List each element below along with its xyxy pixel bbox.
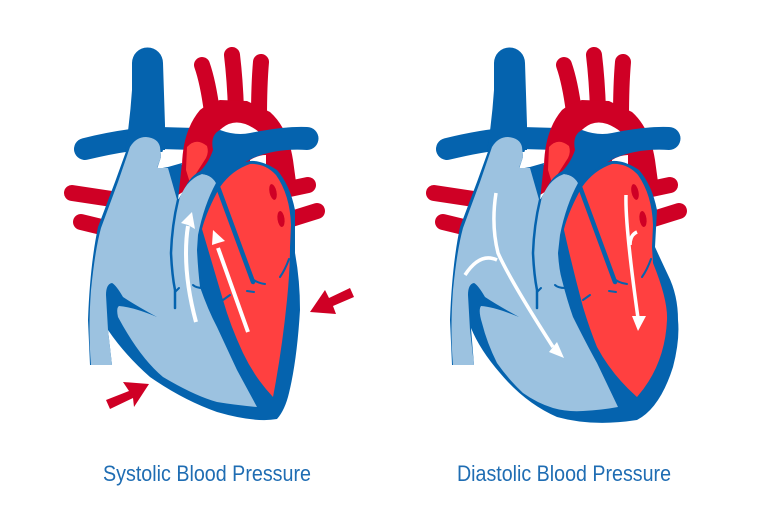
aorta inner bright section [548,142,570,183]
white flow arrows [186,226,248,332]
aorta inner bright section [186,142,208,183]
valve lines [171,187,289,308]
label: systolic: Systolic Blood Pressure [103,461,311,486]
heart outer silhouette [450,146,678,423]
arrow: compression right [310,288,354,314]
white arch openings [580,122,628,165]
red dots [630,183,640,201]
right atrium and ventricle [452,137,618,411]
right atrium and ventricle [90,137,257,407]
red dots [268,183,278,201]
white window [519,150,544,169]
superior vena cava [125,48,165,152]
red side and top vessels [72,55,317,231]
left pulmonary vessel [447,138,557,149]
pulmonary trunk [197,127,318,187]
aorta arch [540,100,658,195]
superior vena cava [487,48,527,152]
left heart red chamber [564,164,667,397]
heart: systolic [72,48,354,420]
left pulmonary vessel [85,138,195,149]
red side and top vessels [434,55,679,231]
arrow: compression bottom [106,382,149,409]
heart: diastolic [434,48,680,423]
white window [157,150,182,169]
pulmonary trunk [559,127,680,187]
label: diastolic: Diastolic Blood Pressure [457,461,671,486]
aorta arch [178,100,296,195]
white flow arrows [465,193,638,347]
left heart red chamber [202,164,291,397]
white arch openings [218,122,266,165]
valve lines [533,187,651,308]
heart outer silhouette [88,146,300,420]
